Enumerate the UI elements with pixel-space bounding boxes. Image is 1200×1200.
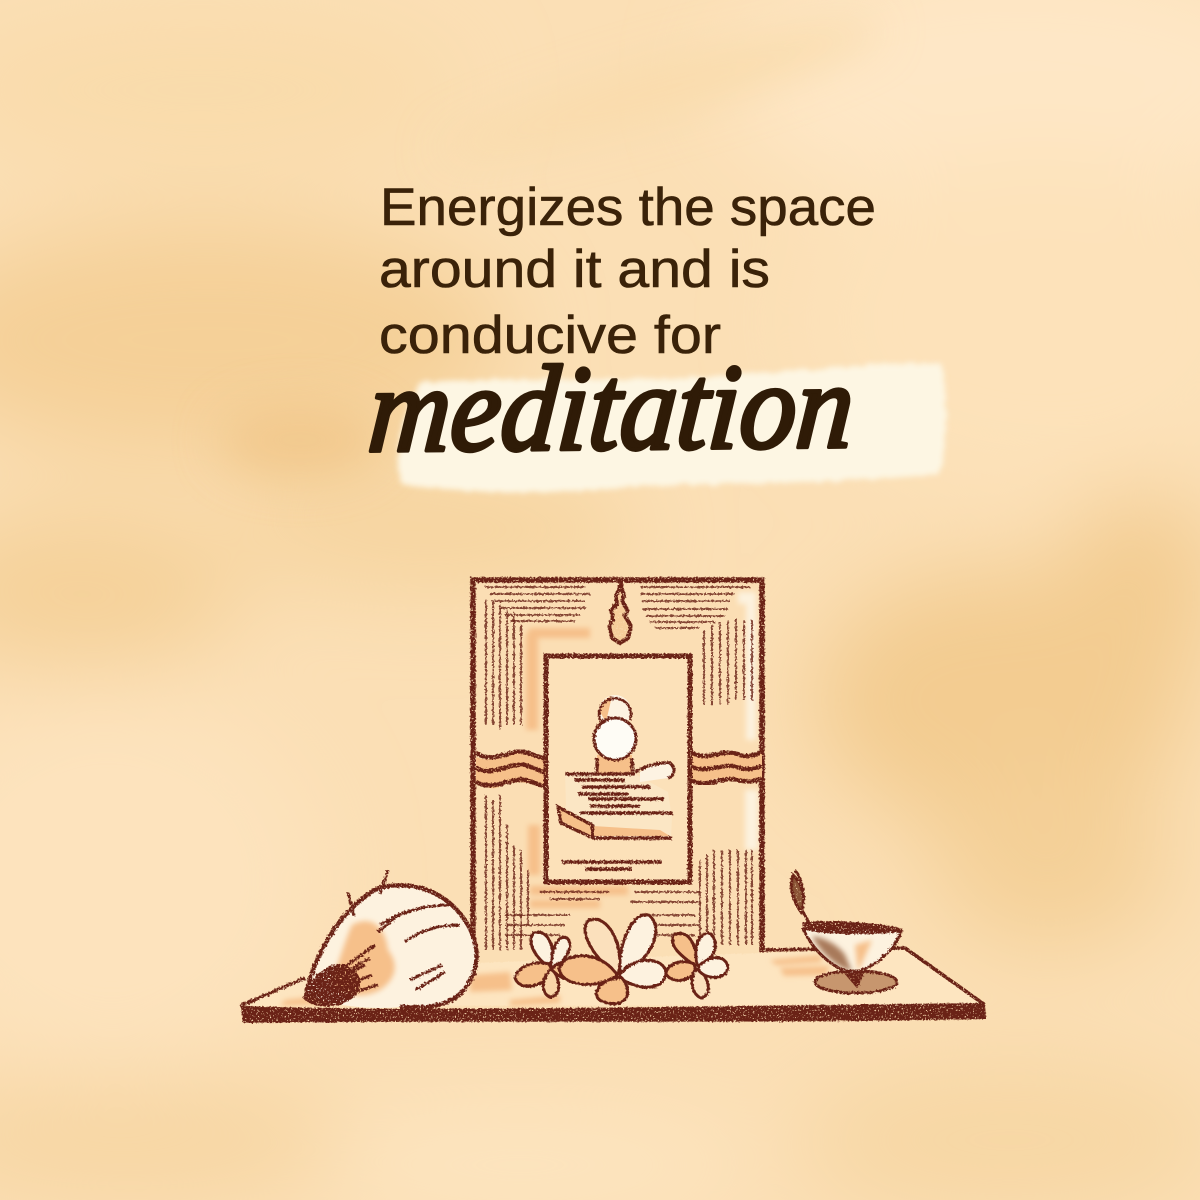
flowers xyxy=(515,915,728,1004)
tray xyxy=(240,948,986,1023)
illustration: shrine with offerings xyxy=(240,580,986,1023)
heading text: conducive for xyxy=(379,306,721,365)
oil lamp xyxy=(791,870,902,993)
large flower xyxy=(559,915,666,1004)
left flower xyxy=(515,932,580,997)
shrine frame xyxy=(473,580,762,952)
heading text xyxy=(379,178,876,365)
coconut xyxy=(304,870,477,1008)
right flower xyxy=(666,933,728,998)
lingam xyxy=(558,695,674,869)
highlight brush stroke behind script word xyxy=(398,364,946,492)
wavy bands right xyxy=(692,752,762,783)
inner panel xyxy=(546,656,690,882)
wavy bands left xyxy=(476,751,546,788)
script word: meditation: meditation xyxy=(364,339,859,478)
flame icon xyxy=(609,584,631,643)
heading text: Energizes the space xyxy=(380,178,876,237)
heading text: around it and is xyxy=(379,240,770,299)
